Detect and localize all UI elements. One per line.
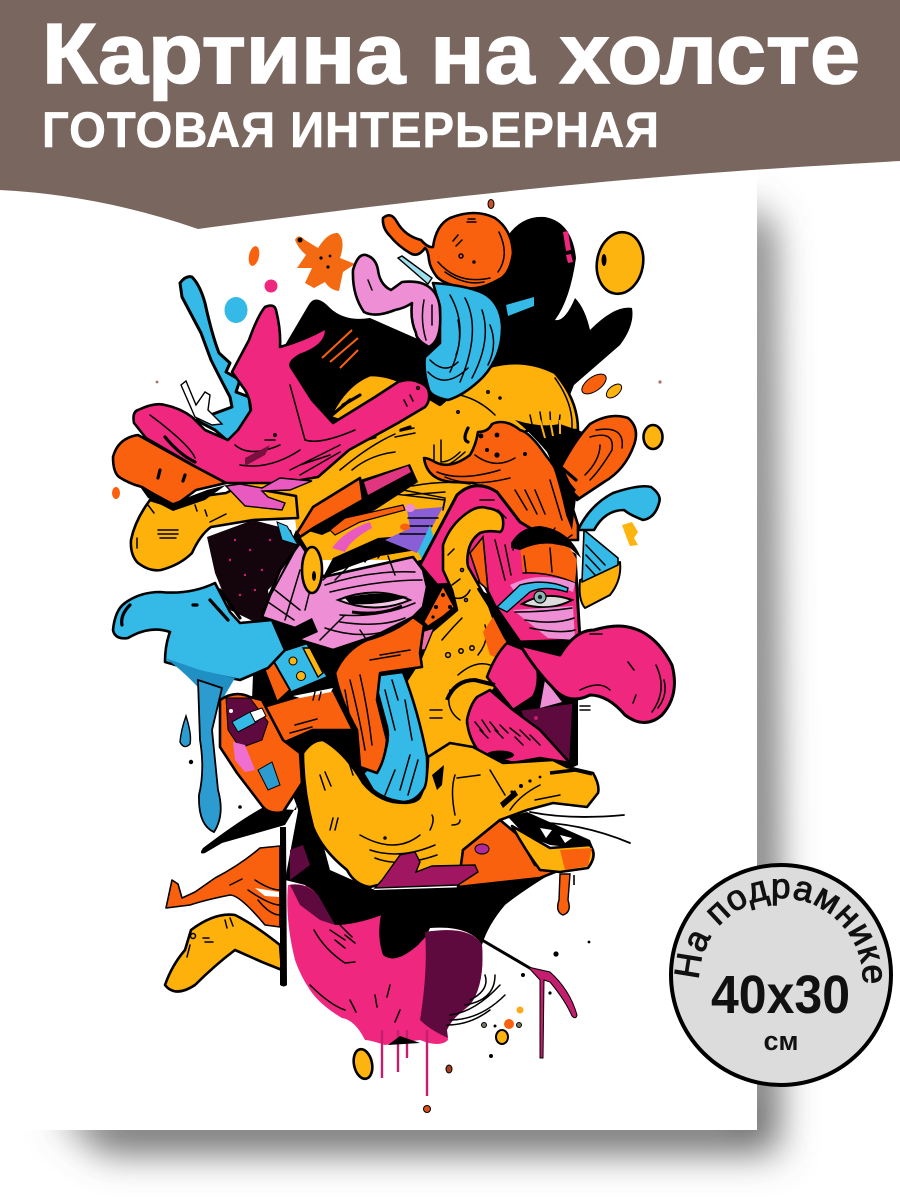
ear inner dark	[226, 698, 268, 748]
orange chunk left of cheek	[470, 537, 488, 590]
orange star	[295, 233, 355, 291]
white claws	[181, 381, 222, 425]
diagonal face line	[478, 588, 545, 695]
purple stripes	[385, 507, 443, 553]
pupil	[538, 595, 542, 599]
blue fan	[582, 530, 618, 582]
blue central tongue	[363, 672, 427, 802]
black mouth	[508, 812, 594, 850]
orange bar	[297, 478, 363, 537]
thin whisker	[482, 940, 545, 977]
black bar	[305, 464, 418, 535]
orange swirl	[335, 617, 424, 773]
eye lid	[345, 594, 408, 604]
orange sliver	[330, 505, 405, 535]
brow bristles	[323, 532, 410, 580]
orange dot	[400, 524, 410, 530]
yellow shape detail	[187, 918, 233, 957]
white bone	[250, 708, 266, 722]
pink knob	[405, 504, 415, 512]
pink neck	[287, 884, 482, 1045]
lower nose pink	[467, 690, 570, 763]
magenta under jaw	[375, 852, 478, 888]
yellow worm specks	[430, 549, 490, 720]
small drip line	[573, 875, 575, 885]
yellow drop bottom	[351, 1047, 375, 1081]
title: Картина на холсте	[42, 7, 860, 102]
blue stem	[180, 277, 251, 443]
nose details	[580, 634, 665, 712]
ear	[220, 694, 302, 813]
pink nose	[520, 626, 674, 722]
hair on hand	[295, 340, 360, 415]
white rim on arm	[293, 688, 333, 698]
disc spot	[602, 254, 606, 266]
black band behind forehead	[515, 420, 583, 530]
yellow rivets	[289, 657, 306, 680]
magenta dot on chin	[475, 844, 489, 854]
arm details	[290, 692, 321, 733]
vertical black stroke	[280, 827, 287, 986]
pink bar	[364, 466, 411, 495]
brow bristles	[513, 527, 572, 550]
blue tube on dome	[398, 256, 432, 284]
fan ribs	[586, 545, 605, 575]
black eyebrow	[511, 526, 581, 558]
hair speckles	[229, 539, 271, 596]
nub dots	[431, 593, 452, 619]
ear bristles	[562, 468, 578, 498]
yellow fringe strokes	[540, 420, 560, 438]
blue box	[270, 643, 328, 693]
orange hair strokes	[322, 330, 358, 368]
ear inner pink	[233, 742, 255, 772]
ear details	[585, 429, 622, 480]
jaw details	[320, 750, 560, 862]
black hair mass	[285, 217, 632, 440]
pink splash	[332, 522, 372, 552]
lower left yellow shape	[165, 915, 282, 992]
lip orange tip	[560, 848, 592, 870]
yellow crown	[330, 363, 578, 460]
yellow oval	[302, 547, 322, 593]
badge size: 40x30	[711, 965, 850, 1025]
neck whiskers	[447, 975, 505, 1025]
blue drip	[198, 680, 222, 832]
teardrop	[180, 716, 190, 747]
ear inner blue	[258, 762, 280, 790]
pink marks on hair	[563, 231, 573, 263]
worm details	[368, 280, 432, 340]
orange capsule	[579, 370, 609, 398]
lobe shadow	[138, 484, 226, 511]
blue accent near hair	[277, 522, 298, 545]
yellow strap	[303, 648, 323, 677]
orange tab	[262, 655, 290, 702]
lilac under eye	[513, 606, 575, 640]
yellow forehead band	[226, 400, 530, 560]
yellow lobe details	[137, 505, 226, 548]
right orange ear	[561, 416, 636, 500]
blue facet	[418, 525, 436, 570]
left orange lobe	[113, 435, 226, 507]
top orange ball with squiggle	[383, 213, 513, 288]
forehead dots	[479, 433, 527, 458]
neck lines	[310, 925, 400, 1022]
forehead thick strokes	[322, 427, 468, 468]
pink hand details	[150, 385, 419, 475]
panel lines	[523, 548, 575, 583]
small pink tongue	[419, 628, 434, 650]
jaw dots	[510, 776, 541, 794]
orange forehead	[424, 422, 578, 540]
jaw top lip contour	[550, 770, 592, 774]
bottom small drops	[424, 1006, 524, 1112]
yellow capsule	[604, 381, 624, 401]
yellow jaw	[303, 740, 598, 887]
right face hatching	[480, 500, 511, 580]
blue tongue lines	[385, 680, 418, 795]
blue ear peg	[232, 712, 257, 732]
blue blob marks	[122, 590, 240, 625]
lower left orange shape	[166, 846, 280, 927]
yellow fin	[580, 562, 620, 608]
pale lilac face	[262, 543, 427, 650]
ear highlight	[229, 709, 233, 713]
ball details	[438, 219, 504, 283]
lower lash	[352, 606, 402, 613]
dark magenta left patch	[290, 845, 310, 880]
badge arc text: На подрамнике	[674, 878, 882, 983]
nostril	[486, 750, 514, 760]
yellow disc	[592, 228, 648, 298]
yellow forehead details	[340, 428, 470, 510]
orange pattern nub	[423, 585, 455, 627]
pink worm	[353, 255, 440, 347]
neck drips	[382, 1030, 427, 1096]
swirl strokes	[345, 650, 410, 750]
orange shape detail	[230, 879, 280, 915]
left yellow lobe	[131, 486, 298, 570]
pink dot	[264, 280, 278, 292]
cheek crease black	[432, 765, 518, 808]
nose ring	[447, 680, 495, 700]
small orange splash	[247, 245, 261, 267]
blue left blob	[113, 583, 285, 680]
size badge	[669, 863, 893, 1087]
pink hand	[134, 306, 429, 483]
subtitle: ГОТОВАЯ ИНТЕРЬЕРНАЯ	[42, 102, 660, 158]
stripe details	[400, 518, 438, 534]
pink drip right	[528, 967, 577, 1058]
canvas drop shadow	[55, 200, 778, 1152]
blue dome	[424, 283, 502, 400]
lilac forehead band	[510, 577, 575, 592]
right small squiggle	[622, 522, 638, 546]
stubble	[475, 720, 540, 745]
orange left speck	[112, 487, 120, 499]
lip yellow	[512, 826, 594, 872]
crown contour and fringe	[408, 378, 572, 440]
orange top speck	[488, 200, 494, 208]
eye white	[522, 596, 572, 607]
white stripe	[255, 888, 279, 897]
blue eye shadow band	[497, 582, 568, 612]
faint specks	[156, 380, 662, 384]
black behind jaw	[201, 770, 578, 960]
darker blue base	[165, 658, 235, 700]
orange forehead details	[437, 455, 562, 520]
orange chunk below worm	[483, 617, 510, 662]
yellow dot right	[644, 425, 662, 449]
pale lilac nose patch	[540, 680, 562, 708]
pink nostril area	[487, 643, 538, 710]
artwork: abstract colourful face	[112, 200, 674, 1112]
black face backing	[252, 530, 578, 815]
under eye lines	[515, 608, 575, 632]
dark magenta neck shade	[420, 930, 482, 1038]
yellow worm	[405, 507, 510, 757]
orange wedge beside nose	[495, 625, 512, 668]
black drip slab	[388, 1036, 420, 1045]
closed eye	[338, 592, 410, 608]
mini marks below nose	[580, 706, 590, 710]
canvas	[0, 0, 757, 1130]
orange arm	[252, 690, 353, 743]
mouth whiskers	[527, 812, 630, 843]
orange face panel	[520, 544, 577, 583]
teeth	[540, 806, 572, 843]
bar outline	[403, 490, 445, 508]
left brow	[323, 535, 417, 577]
dark hair patch	[207, 520, 300, 625]
black wedge on neck	[335, 895, 440, 958]
header band	[0, 0, 900, 229]
temple hatching	[262, 545, 422, 645]
magenta connector	[226, 478, 312, 510]
orange drip	[558, 874, 570, 915]
blue dot	[224, 297, 248, 323]
lobe details	[158, 437, 195, 481]
yellow oval pupil	[312, 571, 316, 581]
blue dome ridges	[428, 295, 494, 382]
pink loop	[420, 486, 580, 642]
blue right pipe	[578, 486, 660, 530]
star details	[298, 238, 331, 269]
blue peg	[506, 297, 534, 316]
orange chin	[458, 820, 560, 887]
dark magenta upper shade	[290, 884, 335, 925]
hand dark smear	[245, 445, 270, 466]
nose shadow on lilac	[292, 618, 318, 640]
iris	[534, 591, 546, 603]
dark magenta cheek	[520, 703, 573, 763]
black dots around neck	[189, 760, 590, 995]
badge circle	[671, 865, 891, 1085]
cheek spot	[534, 716, 538, 720]
badge unit: см	[764, 1026, 798, 1056]
